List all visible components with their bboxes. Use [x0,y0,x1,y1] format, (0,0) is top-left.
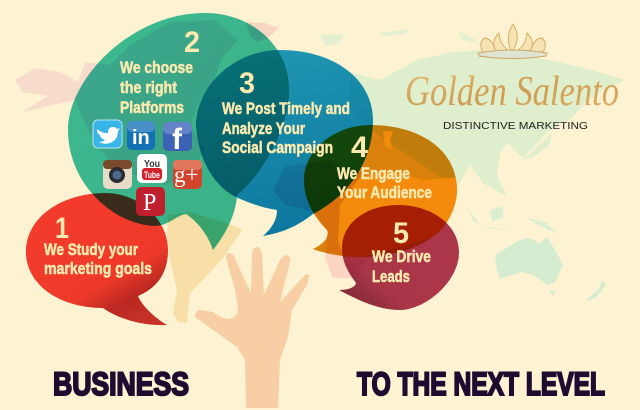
map: africa [273,160,420,278]
icon: twitter [93,120,122,148]
step 2 text: Platforms [120,98,184,117]
hand [195,247,309,408]
icon: youtube [137,154,167,183]
step 5 text [372,217,431,286]
step 4 text: Your Audience [337,183,432,202]
icon: linkedin: in [132,127,150,149]
icon: google plus: g+ [174,162,198,187]
tagline: DISTINCTIVE MARKETING [443,120,588,132]
icon: pinterest: P [143,190,156,216]
step 3 text: We Post Timely and [222,99,350,118]
step 5 text: 5 [393,217,409,250]
step 5 text: Leads [372,267,410,286]
step 2 text: the right [120,78,177,97]
map: indonesia [465,205,558,234]
speech bubble 1 [26,193,168,325]
step 3 text: Analyze Your [222,119,305,138]
map: greenland [246,22,279,42]
step 4 text [337,131,432,202]
social icons [93,120,202,216]
speech bubble 5 [339,205,459,310]
step 1 text: 1 [55,212,69,245]
heading left: BUSINESS [53,366,189,402]
step 2 text: 2 [184,26,200,59]
icon: facebook: f [172,123,183,156]
step 2 text [120,26,200,117]
map: australia [495,237,563,285]
map: japan [523,133,552,160]
step 3 text [222,67,350,157]
step 4 text: We Engage [337,164,410,183]
step 1 text [44,212,152,278]
step 4 text: 4 [351,131,368,164]
icon: crown [478,24,547,58]
world map [15,20,625,323]
map: eurasia [350,50,625,197]
speech bubble 2 [68,13,289,250]
map: arctic islands [320,29,478,46]
step 1 text: We Study your [44,240,138,259]
icon: youtube: You [144,159,160,170]
map: north america [15,20,238,185]
step 3 text: Social Campaign [222,138,333,157]
bright land inside bubble 4 [338,131,460,262]
step 2 text: We choose [120,58,193,77]
step 5 text: We Drive [372,247,431,266]
step 1 text: marketing goals [44,259,152,278]
map: tasmania and new zealand [549,280,606,302]
speech bubble 3 [196,50,373,236]
map: south america [167,212,242,323]
step 3 text: 3 [239,67,255,100]
icon: youtube: Tube [144,170,160,180]
icon: instagram [103,160,132,189]
speech bubble 4 [304,125,457,257]
